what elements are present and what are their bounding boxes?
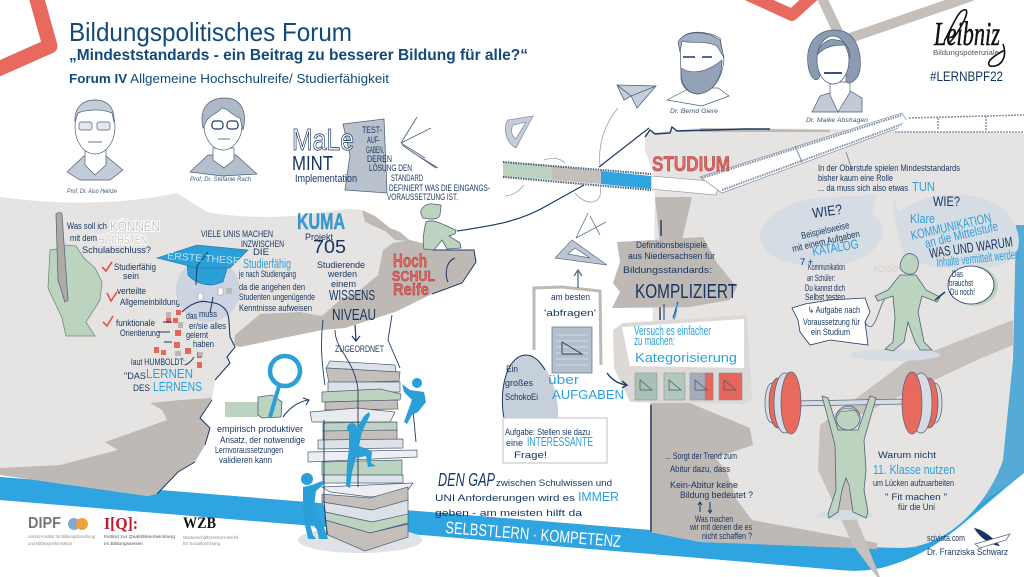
panel: head with thought bubble and cap: "DAS xyxy=(124,371,146,382)
panel: Was soll ich können: KÖNNEN xyxy=(110,217,160,234)
text block: KUMA: Projekt xyxy=(305,232,333,243)
text block: Oberstufe xyxy=(818,163,960,194)
credit: illustrator with pen: Dr. Franziska Schwarz xyxy=(927,547,1008,558)
logo: Leibniz Bildungspotenziale xyxy=(933,10,1005,66)
panel: Kategorisierung xyxy=(613,315,752,404)
speech bubble: Wie Katalog: Beispielsweise xyxy=(800,220,850,242)
panel: head with thought bubble and cap: muss xyxy=(199,309,217,320)
text block: Oberstufe: ... da muss sich also etwas xyxy=(818,183,908,194)
callout: Aufgabe xyxy=(503,418,607,463)
panel: MaLe MINT: STANDARD xyxy=(391,173,423,183)
text block: Oberstufe: TUN xyxy=(912,179,935,194)
text block: Trend zum Abitur: wir mit denen die es xyxy=(689,522,752,533)
panel: head with thought bubble and cap: gelernt xyxy=(186,330,208,341)
decorative chevron: top right xyxy=(746,0,972,38)
icon: standing person xyxy=(850,254,945,361)
speech bubble: Wie Katalog xyxy=(760,193,883,266)
text block: viele Unis: DIE xyxy=(253,247,269,258)
heading: Studium: STUDIUM xyxy=(652,153,730,176)
text block: empirisch produktiver Ansatz: empirisch produktiver xyxy=(217,424,303,435)
portrait: Prof. Dr. Aiso Heinze: Prof. Dr. Aiso Heinze xyxy=(67,189,118,195)
panel: MaLe MINT: AUF- xyxy=(367,135,380,145)
decorative chevron: top left xyxy=(0,0,50,70)
text block: Trend zum Abitur: Bildung bedeutet ? xyxy=(680,490,753,501)
icon: chocolate egg: SchokoEi xyxy=(505,392,538,403)
text block: KUMA: NIVEAU xyxy=(332,307,376,324)
callout: Aufgabe: INTERESSANTE xyxy=(527,434,593,449)
text block: KUMA: 705 xyxy=(313,237,346,257)
panel: MaLe MINT: Implementation xyxy=(295,173,357,185)
portrait: Prof. Dr. Stefanie Rach xyxy=(190,98,257,183)
text block: viele Unis: Studenten ungenügende xyxy=(239,292,315,303)
logo: IQB xyxy=(104,514,175,547)
text block: viele Unis xyxy=(201,229,315,314)
icon: paper plane xyxy=(617,85,656,108)
logo: DIPF: DIPF xyxy=(28,515,61,532)
scroll: Aufgabe nach Voraussetzung: ↳ Aufgabe nach xyxy=(808,305,860,316)
icon: compass and pen xyxy=(401,117,438,168)
red and gray dots xyxy=(154,310,202,368)
text block: Kommunikation an Schüler xyxy=(800,257,845,303)
speech bubble: Wie Kommunikation xyxy=(893,193,1020,270)
text block: 11. Klasse nutzen: um Lücken aufzuarbeiten xyxy=(873,478,954,489)
speech bubble: Wie Katalog: KATALOG xyxy=(811,236,860,259)
text block: KUMA xyxy=(297,209,384,354)
portrait: Dr. Maike Abshagen xyxy=(806,30,869,124)
logo: DIPF: Leibniz-Institut für Bildungsforschung xyxy=(28,534,95,539)
panel: head with thought bubble and cap: DES xyxy=(133,383,150,394)
climber bottom xyxy=(301,473,328,539)
heading: Hochschulreife: SCHUL xyxy=(392,268,435,285)
checklist: funktionale xyxy=(116,318,155,329)
text block: viele Unis: Studierfähig xyxy=(243,256,291,271)
callout: Aufgabe: Aufgabe: Stellen sie dazu xyxy=(505,427,590,438)
credit: illustrator with pen: scivista.com xyxy=(927,533,965,544)
logo: IQB: I[Q]: xyxy=(104,514,138,533)
text block: Trend zum Abitur: Kein-Abitur keine xyxy=(670,480,738,491)
scroll: Aufgabe nach Voraussetzung: Voraussetzung für xyxy=(803,317,860,328)
forum line: Forum IV Allgemeine Hochschulreife/ Studierfähigkeit xyxy=(69,71,389,86)
icon: set square xyxy=(555,213,607,265)
books xyxy=(308,361,417,551)
logo: DIPF xyxy=(28,515,95,546)
icon: weightlifter xyxy=(765,372,942,520)
panel: head with thought bubble and cap: haben xyxy=(193,339,214,350)
speech bubble: Wie Kommunikation: an die Mittelstufe xyxy=(923,218,999,251)
speech bubble: Wie Katalog: mit einem Aufgaben xyxy=(791,229,861,255)
panel: head with thought bubble and cap xyxy=(124,245,248,394)
text block: Definitionsbeispiele: KOMPLIZIERT xyxy=(635,281,737,303)
text block: über Aufgaben xyxy=(548,372,627,402)
portrait: Dr. Maike Abshagen: Dr. Maike Abshagen xyxy=(806,118,869,124)
icon: chocolate egg xyxy=(502,355,558,425)
text block: empirisch produktiver Ansatz: Lernvoraussetzungen xyxy=(215,445,283,456)
speech bubble: Das brauchst du noch xyxy=(948,266,998,306)
logo: DIPF: und Bildungsinformation xyxy=(28,541,72,546)
speech bubble: Wie Kommunikation: Klare xyxy=(910,211,935,226)
text block: Den Gap: geben - am meisten hilft da xyxy=(435,508,583,519)
panel: MaLe MINT: DEFINIERT WAS DIE EINGANGS- xyxy=(389,183,490,193)
checklist: Orientierung xyxy=(120,328,160,339)
panel: head with thought bubble and cap: LERNEN xyxy=(146,366,193,381)
speech bubble: Das brauchst du noch: Du noch! xyxy=(950,287,975,298)
text block: empirisch produktiver Ansatz: validieren kann xyxy=(219,455,272,466)
text block: Trend zum Abitur: ... Sorgt der Trend zum xyxy=(665,451,737,462)
sheets xyxy=(635,373,742,400)
portrait: Prof. Dr. Stefanie Rach: Prof. Dr. Stefanie Rach xyxy=(190,177,252,183)
ruler: rising xyxy=(700,113,909,193)
text block: viele Unis: da die angehen den xyxy=(239,282,305,293)
text block: Kommunikation an Schüler: 7 + xyxy=(800,257,814,268)
text block: Den Gap: UNI Anforderungen wird es xyxy=(435,493,575,504)
portrait: Dr. Bernd Giere: Dr. Bernd Giere xyxy=(670,109,719,115)
panel: Kategorisierung: Versuch es einfacher xyxy=(634,323,711,338)
icon: protractor xyxy=(505,116,533,148)
subtitle: „Mindeststandards - ein Beitrag zu besserer Bildung für alle?“ xyxy=(69,47,528,64)
text block: viele Unis: INZWISCHEN xyxy=(241,239,284,250)
panel: MaLe MINT xyxy=(292,117,490,202)
text block: Den Gap: IMMER xyxy=(578,489,619,504)
text block: Kommunikation an Schüler: an Schüler: xyxy=(807,273,835,284)
text block: 11. Klasse nutzen: Warum nicht xyxy=(878,450,936,461)
icon: graduation cap xyxy=(157,245,248,285)
text block: Den Gap: zwischen Schulwissen und xyxy=(496,478,612,489)
text block: Den Gap xyxy=(435,470,619,519)
scroll: Aufgabe nach Voraussetzung: ein Studium xyxy=(811,327,850,338)
climber middle xyxy=(346,412,376,488)
rope line xyxy=(457,128,649,231)
logo: Leibniz Bildungspotenziale: Bildungspotenziale xyxy=(933,48,999,57)
icon: sitting girl xyxy=(421,204,461,250)
checklist: sein xyxy=(123,271,139,282)
panel: left landscape hill xyxy=(0,193,476,496)
icon: standing person: ACHSO xyxy=(873,264,898,274)
speech bubble: Wie Kommunikation: WIE? xyxy=(933,193,960,209)
title: Bildungspolitisches Forum xyxy=(69,17,352,47)
text block: Kommunikation an Schüler: Selbst testen xyxy=(805,292,845,303)
text block: Kommunikation an Schüler: Kommunikation xyxy=(808,262,845,273)
speech bubble: Das brauchst du noch: brauchst xyxy=(949,278,973,289)
panel: am besten abfragen: 'abfragen' xyxy=(544,308,596,319)
logo: WZB: WZB xyxy=(183,515,216,532)
ropes xyxy=(322,315,416,535)
panel: am besten abfragen: am besten xyxy=(551,292,590,303)
panel: Was soll ich können: HÖCHSTEN xyxy=(98,233,147,247)
panel: Kategorisierung: Kategorisierung xyxy=(635,350,737,365)
text block: 11. Klasse nutzen: " Fit machen " xyxy=(885,492,947,503)
text block: KUMA: werden xyxy=(327,269,357,280)
panel: MaLe MINT: MaLe xyxy=(292,122,354,157)
callout: Aufgabe: Frage! xyxy=(514,450,547,461)
panel: Kategorisierung: zu machen: xyxy=(634,333,675,348)
panel: MaLe MINT: TEST- xyxy=(362,125,382,135)
ruler: progress bar xyxy=(503,162,720,195)
panel: am besten abfragen xyxy=(534,270,601,373)
text block: Trend zum Abitur xyxy=(665,451,753,542)
text block: Oberstufe: In der Oberstufe spielen Mindeststandards xyxy=(818,163,960,174)
icon: chocolate egg: Ein xyxy=(506,364,518,375)
exam sheet xyxy=(552,327,592,373)
icon: magnifier and hand xyxy=(225,356,309,418)
panel: MaLe MINT: GABEN, xyxy=(366,145,384,155)
text block: Den Gap: DEN GAP xyxy=(438,470,495,490)
text block: Trend zum Abitur: Was machen xyxy=(695,514,733,525)
text block: Trend zum Abitur: Abitur dazu, dass xyxy=(670,464,730,475)
logo: WZB xyxy=(183,515,238,546)
panel: Was soll ich können xyxy=(48,213,180,339)
ruler: top right xyxy=(895,114,1024,132)
speech bubble: Wie Katalog: WIE? xyxy=(811,201,843,221)
text block: empirisch produktiver Ansatz: Ansatz, der notwendige xyxy=(220,435,305,446)
blue ribbon band xyxy=(0,215,1024,571)
text block: KUMA: Studierende xyxy=(317,260,365,271)
panel: head with thought bubble and cap: laut HUMBOLDT: xyxy=(131,357,185,368)
thought bubble xyxy=(176,258,240,322)
scroll: Aufgabe nach Voraussetzung xyxy=(792,298,885,345)
portrait: Prof. Dr. Aiso Heinze xyxy=(67,100,123,195)
icon: hand with pen xyxy=(48,213,102,336)
panel: Was soll ich können: mit dem xyxy=(70,233,97,244)
paper xyxy=(343,119,387,193)
text block: 11. Klasse nutzen xyxy=(873,450,955,513)
text block: über Aufgaben: über xyxy=(548,372,580,387)
panel: right landscape xyxy=(645,127,1024,577)
book stack with climbers xyxy=(298,315,426,553)
icon: graduation cap: ERSTE THESE xyxy=(167,251,241,267)
panel: head with thought bubble and cap: er/sie alles xyxy=(189,321,226,332)
text block: KUMA: KUMA xyxy=(297,209,345,234)
flight path xyxy=(505,108,618,202)
text block: viele Unis: VIELE UNIS MACHEN xyxy=(201,229,273,240)
text block: viele Unis: je nach Studiengang xyxy=(238,269,296,280)
heading: Hochschulreife xyxy=(392,251,435,299)
logo: WZB: für Sozialforschung xyxy=(183,541,220,546)
text block: KUMA: einem xyxy=(331,279,356,290)
panel: Was soll ich können: Was soll ich xyxy=(67,221,107,232)
speech bubble: Wie Kommunikation: KOMMUNIKATION xyxy=(909,210,993,243)
panel: Was soll ich können: Schulabschluss? xyxy=(82,245,151,256)
credit: illustrator with pen xyxy=(927,528,1010,558)
text block: KUMA: WISSENS xyxy=(329,287,375,304)
checklist: Studierfähig xyxy=(114,262,156,273)
hashtag: #LERNBPF22 xyxy=(930,68,1003,84)
text block: Definitionsbeispiele xyxy=(612,237,737,326)
logo: IQB: Institut zur Qualitätsentwicklung xyxy=(104,534,175,540)
ribbon label: Selbstlern-Kompetenz: SELBSTLERN · KOMPETENZ xyxy=(445,518,622,551)
text block: Definitionsbeispiele: aus Niedersachsen für xyxy=(628,251,715,262)
heading: Hochschulreife: Hoch xyxy=(393,251,427,271)
text block: über Aufgaben: AUFGABEN xyxy=(552,387,624,402)
panel: MaLe MINT: DEREN xyxy=(367,154,392,164)
text block: Definitionsbeispiele: Definitionsbeispiele xyxy=(636,240,707,251)
text block: Definitionsbeispiele: Bildungsstandards: xyxy=(623,265,712,276)
panel: head with thought bubble and cap: LERNENS xyxy=(153,379,202,394)
text block: 11. Klasse nutzen: 11. Klasse nutzen xyxy=(873,462,955,477)
panel: MaLe MINT: MINT xyxy=(292,153,333,175)
text block: KUMA: ZUGEORDNET xyxy=(335,344,384,354)
text block: viele Unis: Kenntnisse aufweisen xyxy=(239,303,312,314)
checklist xyxy=(102,262,180,339)
portrait: Dr. Bernd Giere xyxy=(667,32,729,115)
checklist: verteilte xyxy=(117,286,146,297)
text block: empirisch produktiver Ansatz xyxy=(215,424,305,466)
text block: Kommunikation an Schüler: Du kannst dich xyxy=(805,283,845,294)
text block: 11. Klasse nutzen: für die Uni xyxy=(898,502,935,513)
panel: MaLe MINT: LÖSUNG DEN xyxy=(369,163,412,173)
panel: head with thought bubble and cap: das xyxy=(186,311,197,322)
climber top xyxy=(402,378,426,424)
text block: Oberstufe: bisher kaum eine Rolle xyxy=(818,173,893,184)
text block: Trend zum Abitur: nicht schaffen ? xyxy=(702,531,752,542)
logo: WZB: Wissenschaftszentrum Berlin xyxy=(183,535,238,540)
speech bubble: Das brauchst du noch: Das xyxy=(952,269,963,280)
heading: Hochschulreife: Reife xyxy=(393,280,429,299)
callout: Aufgabe: eine xyxy=(506,438,523,449)
panel: MaLe MINT: VORAUSSETZUNG IST. xyxy=(387,192,458,202)
logo: IQB: im Bildungswesen xyxy=(104,541,143,547)
checklist: Allgemeinbildung xyxy=(120,297,180,308)
icon: chocolate egg: großes xyxy=(505,378,533,389)
